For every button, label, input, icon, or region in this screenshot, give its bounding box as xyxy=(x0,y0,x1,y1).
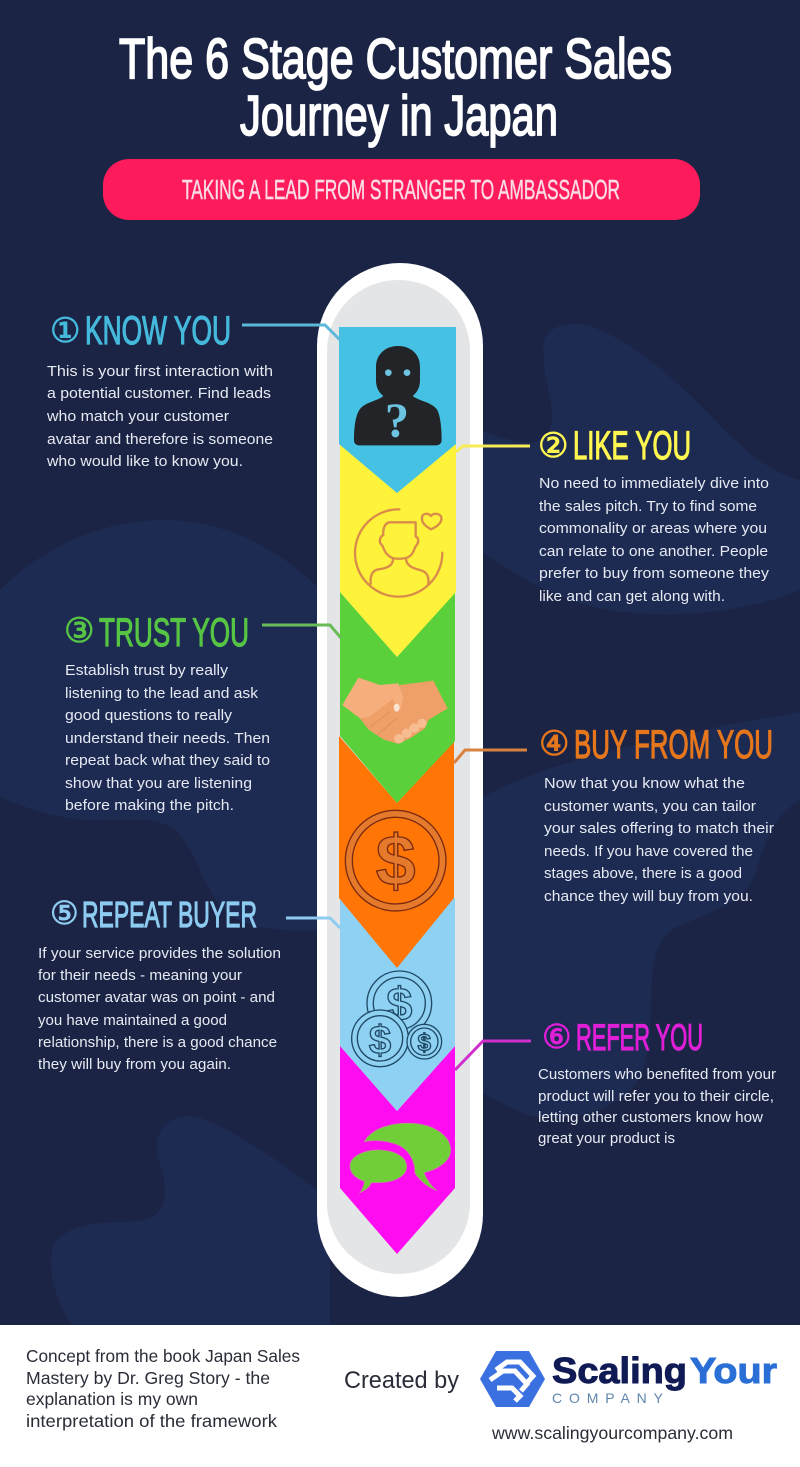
heading: like you: LIKE YOU xyxy=(573,424,691,468)
heading: refer you: REFER YOU xyxy=(576,1017,703,1058)
text: like you: No need to immediately dive into xyxy=(539,475,769,492)
chevron: know you xyxy=(339,327,456,493)
connector: trust you xyxy=(262,625,341,638)
text: like you xyxy=(539,475,770,605)
text: trust you: understand their needs. Then xyxy=(65,730,270,747)
text: know you: This is your first interaction with xyxy=(47,363,273,380)
text: buy from you: your sales offering to match their xyxy=(544,820,774,837)
heading: know you: ① xyxy=(50,311,80,351)
chevron: trust you xyxy=(340,592,455,803)
text: repeat buyer: If your service provides the solution xyxy=(38,945,281,962)
text: like you: prefer to buy from someone they xyxy=(539,565,770,582)
heading: repeat buyer: ⑤ xyxy=(50,894,79,932)
text: know you xyxy=(46,363,273,470)
heading: refer you: ⑥ xyxy=(542,1017,572,1056)
heading: repeat buyer: REPEAT BUYER xyxy=(82,894,257,935)
icon: dollar coin: $ xyxy=(376,821,416,901)
text: like you: like and can get along with. xyxy=(539,588,725,605)
connector: refer you xyxy=(455,1041,531,1070)
icon: stacked coins xyxy=(352,971,442,1067)
text: like you: the sales pitch. Try to find some xyxy=(539,498,757,515)
connector: repeat buyer xyxy=(286,918,340,928)
text: buy from you: Now that you know what the xyxy=(544,775,745,792)
icon: handshake xyxy=(342,678,448,744)
text: refer you: letting other customers know how xyxy=(538,1109,763,1126)
stage 5: repeat buyer xyxy=(38,894,281,1073)
logo tagline: COMPANY xyxy=(552,1390,664,1406)
footer xyxy=(0,1325,800,1467)
logo wordmark: Scaling xyxy=(552,1350,687,1391)
text: trust you: good questions to really xyxy=(65,707,233,724)
text: repeat buyer: customer avatar was on point - and xyxy=(38,989,275,1006)
text: refer you xyxy=(538,1066,776,1147)
heading: trust you xyxy=(64,611,249,655)
heading: trust you: ③ xyxy=(64,611,94,651)
chevron: like you xyxy=(340,443,456,657)
heading: know you xyxy=(50,309,231,353)
heading: know you: KNOW YOU xyxy=(85,309,231,353)
created by: Created by xyxy=(344,1367,459,1394)
text: like you: can relate to one another. People xyxy=(539,543,768,560)
text: know you: who match your customer xyxy=(46,408,229,425)
text: trust you: Establish trust by really xyxy=(65,662,229,679)
text: refer you: product will refer you to their circle, xyxy=(538,1088,774,1105)
icon: speech bubbles xyxy=(350,1123,451,1193)
text: trust you: show that you are listening xyxy=(65,775,252,792)
chevron: refer you xyxy=(340,1046,455,1254)
text: repeat buyer: you have maintained a good xyxy=(38,1012,227,1029)
text: repeat buyer: relationship, there is a good chance xyxy=(38,1034,277,1051)
text: buy from you: customer wants, you can tailor xyxy=(544,798,756,815)
logo wordmark xyxy=(552,1350,777,1391)
text: repeat buyer: they will buy from you again. xyxy=(38,1056,231,1073)
text: buy from you: needs. If you have covered the xyxy=(544,843,753,860)
heading: refer you xyxy=(542,1017,703,1058)
icon: dollar coin xyxy=(345,810,446,911)
heading: like you: ② xyxy=(538,426,568,466)
heading: repeat buyer xyxy=(50,894,257,935)
logo wordmark: Your xyxy=(690,1350,777,1391)
title xyxy=(119,27,672,148)
logo hexagon xyxy=(480,1351,545,1407)
stage 6: refer you xyxy=(538,1017,776,1147)
heading: like you xyxy=(538,424,691,468)
connector: buy from you xyxy=(454,750,527,763)
text: repeat buyer xyxy=(38,945,281,1073)
text: trust you: before making the pitch. xyxy=(65,797,234,814)
footer note: explanation is my own xyxy=(26,1389,198,1409)
logo xyxy=(480,1350,777,1407)
stage 3: trust you xyxy=(64,611,270,814)
stage 4: buy from you xyxy=(539,723,774,905)
text: know you: who would like to know you. xyxy=(46,453,243,470)
title: Journey in Japan xyxy=(240,84,558,148)
text: know you: a potential customer. Find leads xyxy=(47,385,271,402)
text: trust you: listening to the lead and ask xyxy=(65,685,259,702)
icon: stacked coins: $ xyxy=(369,1018,391,1062)
icon: mystery person xyxy=(354,346,442,448)
stage 1: know you xyxy=(46,309,273,470)
chevron: buy from you xyxy=(339,736,454,968)
icon: stacked coins: $ xyxy=(386,978,412,1030)
capsule xyxy=(317,263,483,1297)
footer note: Mastery by Dr. Greg Story - the xyxy=(26,1368,270,1388)
icon: stacked coins: $ xyxy=(418,1029,431,1056)
text: buy from you: chance they will buy from you. xyxy=(544,888,753,905)
footer note xyxy=(26,1346,300,1431)
footer note: interpretation of the framework xyxy=(26,1411,277,1431)
text: know you: avatar and therefore is someone xyxy=(47,431,273,448)
text: buy from you xyxy=(544,775,774,905)
text: refer you: Customers who benefited from your xyxy=(538,1066,776,1083)
heading: trust you: TRUST YOU xyxy=(99,611,249,655)
text: trust you: repeat back what they said to xyxy=(65,752,270,769)
icon: mystery person: ? xyxy=(385,395,409,448)
heading: buy from you: ④ xyxy=(539,724,569,764)
subtitle banner xyxy=(103,159,700,220)
text: trust you xyxy=(65,662,270,814)
stage 2: like you xyxy=(538,424,770,605)
text: like you: commonality or areas where you xyxy=(539,520,767,537)
connector: like you xyxy=(456,446,530,452)
text: buy from you: stages above, there is a good xyxy=(544,865,742,882)
icon: person with heart xyxy=(355,509,442,597)
connector: know you xyxy=(242,325,340,340)
text: refer you: great your product is xyxy=(538,1130,675,1147)
footer note: Concept from the book Japan Sales xyxy=(26,1346,300,1366)
chevron: repeat buyer xyxy=(340,898,455,1111)
website: www.scalingyourcompany.com xyxy=(491,1423,733,1443)
text: repeat buyer: for their needs - meaning your xyxy=(38,967,242,984)
